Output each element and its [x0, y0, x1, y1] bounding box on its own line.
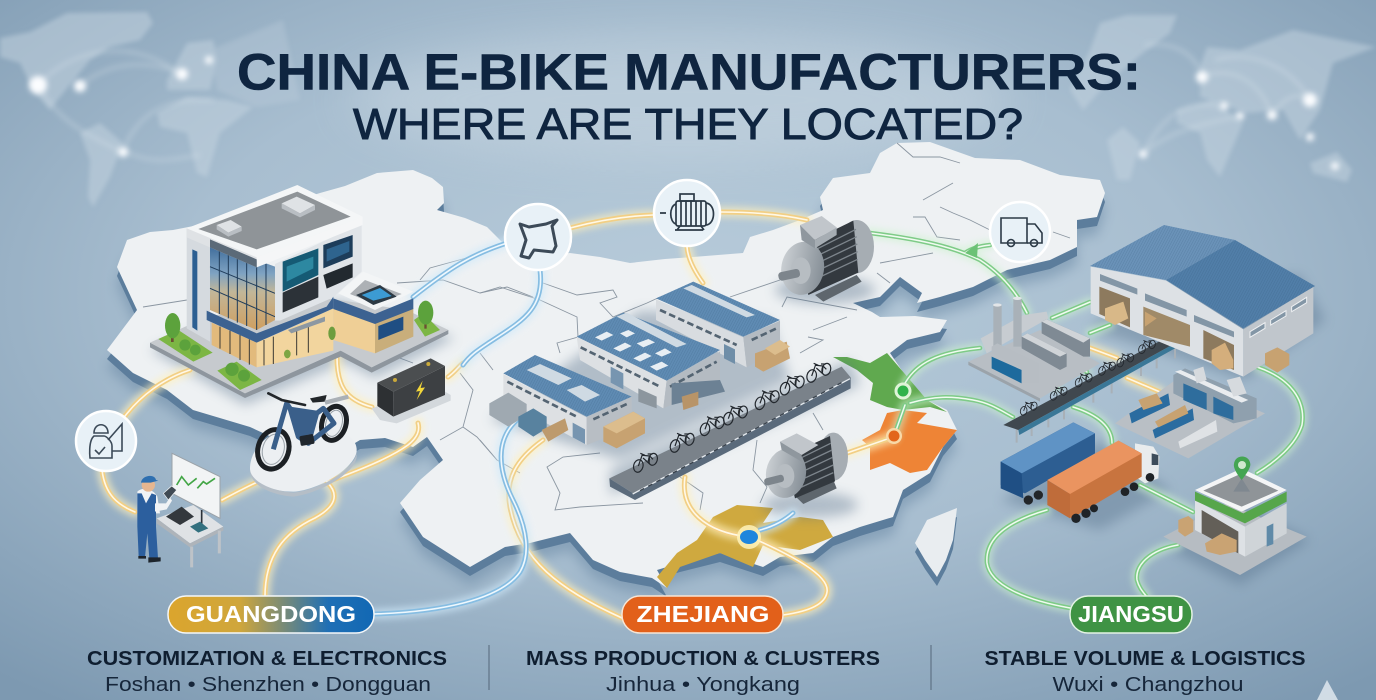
Taiwan — [915, 508, 957, 586]
assembly machinery platform — [968, 297, 1100, 402]
factory central — [577, 313, 725, 408]
connectors: yellow routes — [102, 212, 1160, 618]
Zhejiang map marker — [886, 428, 902, 444]
title fog — [350, 40, 1010, 160]
region card: Zhejiang: ZHEJIANG — [636, 601, 770, 627]
packing stations — [1115, 367, 1265, 458]
green return arrow — [965, 243, 978, 258]
trees — [165, 301, 433, 382]
battery pack — [372, 358, 451, 423]
factory south — [489, 355, 632, 445]
stacked cartons — [542, 340, 790, 448]
region card: Jiangsu — [984, 596, 1306, 696]
background world map left — [0, 12, 300, 207]
distribution centre with location pin — [1163, 456, 1307, 575]
warehouse — [1090, 225, 1315, 377]
icon: inspection checklist — [76, 411, 136, 471]
Zhejiang strengths: MASS PRODUCTION & CLUSTERS — [526, 647, 880, 670]
region card: Guangdong: GUANGDONG — [186, 601, 356, 627]
region card: Zhejiang — [526, 596, 880, 696]
connectors: green routes — [870, 233, 1303, 608]
subtitle: WHERE ARE THEY LOCATED? — [353, 100, 1023, 149]
background world map right — [1070, 15, 1376, 182]
Jiangsu strengths: STABLE VOLUME & LOGISTICS — [984, 647, 1306, 670]
icon: electric motor — [654, 180, 720, 246]
bike conveyor line — [1003, 327, 1190, 443]
connectors: blue routes — [374, 243, 793, 614]
province borders — [143, 143, 1070, 510]
region card: Guangdong — [87, 596, 447, 696]
left scene: electronics hub — [137, 185, 451, 567]
highlighted province: Jiangsu — [833, 353, 947, 412]
blue container truck — [1001, 422, 1095, 505]
Zhejiang cities: Jinhua • Yongkang — [606, 673, 800, 696]
Jiangsu cities: Wuxi • Changzhou — [1052, 673, 1244, 696]
Guangdong strengths: CUSTOMIZATION & ELECTRONICS — [87, 647, 447, 670]
icon: delivery truck — [990, 202, 1050, 262]
Guangdong cities: Foshan • Shenzhen • Dongguan — [105, 673, 431, 696]
Guangdong map marker — [737, 525, 761, 549]
factory north — [656, 282, 780, 367]
e-bike on pedestal — [250, 393, 357, 497]
Jiangsu map marker — [894, 382, 912, 400]
icon: bike frame — [505, 204, 571, 270]
production conveyor with e-bikes — [609, 362, 851, 500]
right scene: logistics hub — [968, 225, 1315, 575]
object shadows — [150, 275, 1325, 585]
worker at a desk with chart board — [137, 453, 223, 567]
centre scene: manufacturing cluster — [489, 216, 874, 504]
highlighted province: Zhejiang — [862, 410, 957, 473]
orange container truck — [1047, 441, 1159, 523]
title — [237, 44, 1141, 149]
highlighted province: Guangdong — [657, 505, 833, 588]
title: CHINA E-BIKE MANUFACTURERS: — [237, 44, 1141, 100]
region card: Jiangsu: JIANGSU — [1078, 601, 1184, 627]
motor north — [777, 216, 874, 302]
motor south — [762, 433, 848, 504]
electronics factory building — [150, 185, 448, 398]
map of China — [107, 142, 1105, 606]
